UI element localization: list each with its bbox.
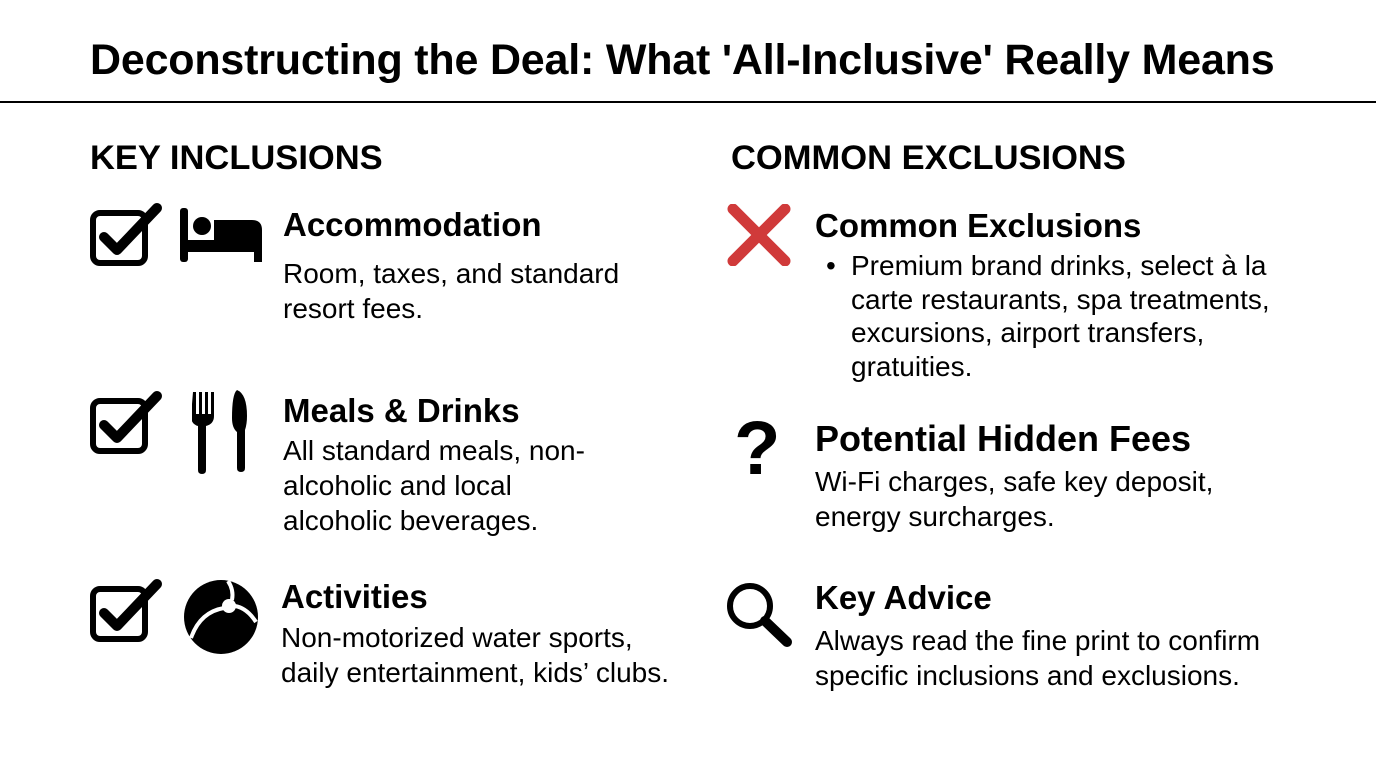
text: specific inclusions and exclusions. [815,660,1240,691]
bullet list [826,250,1270,382]
text: Room, taxes, and standard [283,258,619,289]
text [815,466,1213,532]
item: meals [90,390,585,536]
text: Always read the fine print to confirm [815,625,1260,656]
icon: beach ball [184,580,258,654]
text [283,435,585,536]
bullet list: Premium brand drinks, select à la [851,250,1267,281]
icon: magnifier [727,583,792,647]
heading: Meals & Drinks [283,392,520,429]
text: Wi-Fi charges, safe key deposit, [815,466,1213,497]
item: hidden fees [734,406,1213,532]
heading: Key Advice [815,579,992,616]
heading: common exclusions: COMMON EXCLUSIONS [731,139,1126,177]
title: Deconstructing the Deal: What 'All-Inclusive' Really Means [90,36,1274,84]
item: key advice [727,579,1260,691]
icon: red x [728,204,790,266]
text: daily entertainment, kids’ clubs. [281,657,669,688]
icon: fork and knife [192,390,247,474]
text [283,258,619,324]
heading: Common Exclusions [815,207,1141,244]
text [815,625,1260,691]
icon: checkbox [90,579,162,642]
bullet list: • [826,250,836,281]
item: accommodation [90,203,619,324]
icon: bed [180,208,262,262]
text: resort fees. [283,293,423,324]
icon: question mark: ? [734,406,780,491]
text: All standard meals, non- [283,435,585,466]
item: common exclusions [728,204,1270,382]
bullet list: carte restaurants, spa treatments, [851,284,1270,314]
heading: Potential Hidden Fees [815,418,1191,459]
heading: Activities [281,578,428,615]
icon: checkbox [90,391,162,454]
text: energy surcharges. [815,501,1055,532]
bullet list: gratuities. [851,350,972,382]
text: alcoholic beverages. [283,505,538,536]
item: activities [90,578,669,688]
icon: checkbox [90,203,162,266]
text [281,622,669,688]
bullet list: excursions, airport transfers, [851,317,1204,348]
heading: Accommodation [283,206,542,243]
text: Non-motorized water sports, [281,622,633,653]
text: alcoholic and local [283,470,512,501]
heading: key inclusions: KEY INCLUSIONS [90,139,383,177]
